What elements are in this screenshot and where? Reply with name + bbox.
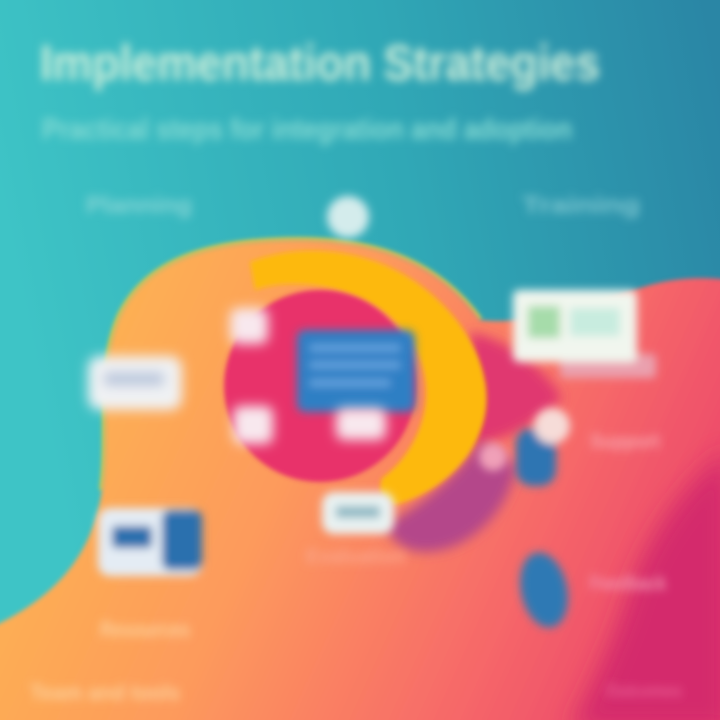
central blue chart panel <box>297 330 415 412</box>
title: Implementation Strategies <box>40 35 600 91</box>
magenta connector <box>470 332 562 445</box>
top circle icon <box>327 196 369 238</box>
lower blue oval icon <box>514 548 574 632</box>
subtitle: Practical steps for integration and adoption <box>42 113 572 146</box>
right white card <box>513 290 656 378</box>
right label two: Feedback <box>590 573 667 595</box>
bottom centre label: Evaluation <box>306 546 406 568</box>
bottom-right label: Outcomes <box>606 681 682 701</box>
left white card <box>88 356 182 410</box>
yellow ring <box>250 251 487 505</box>
lower-left label: Resources <box>100 617 190 642</box>
purple arc <box>385 440 516 552</box>
right blue pill icon <box>479 408 570 486</box>
pink circle <box>224 290 416 482</box>
warm wave shape <box>0 240 720 720</box>
bottom centre card <box>322 492 394 534</box>
white badges on circle <box>230 308 386 444</box>
yellow-green rim of wave <box>102 240 480 490</box>
bottom-left blue card <box>98 508 202 576</box>
top-right label: Training <box>522 192 640 219</box>
top-left label: Planning <box>86 192 192 219</box>
right label one: Support <box>590 431 660 453</box>
bottom-left label: Team and tools <box>30 680 180 705</box>
magenta corner <box>570 450 720 720</box>
